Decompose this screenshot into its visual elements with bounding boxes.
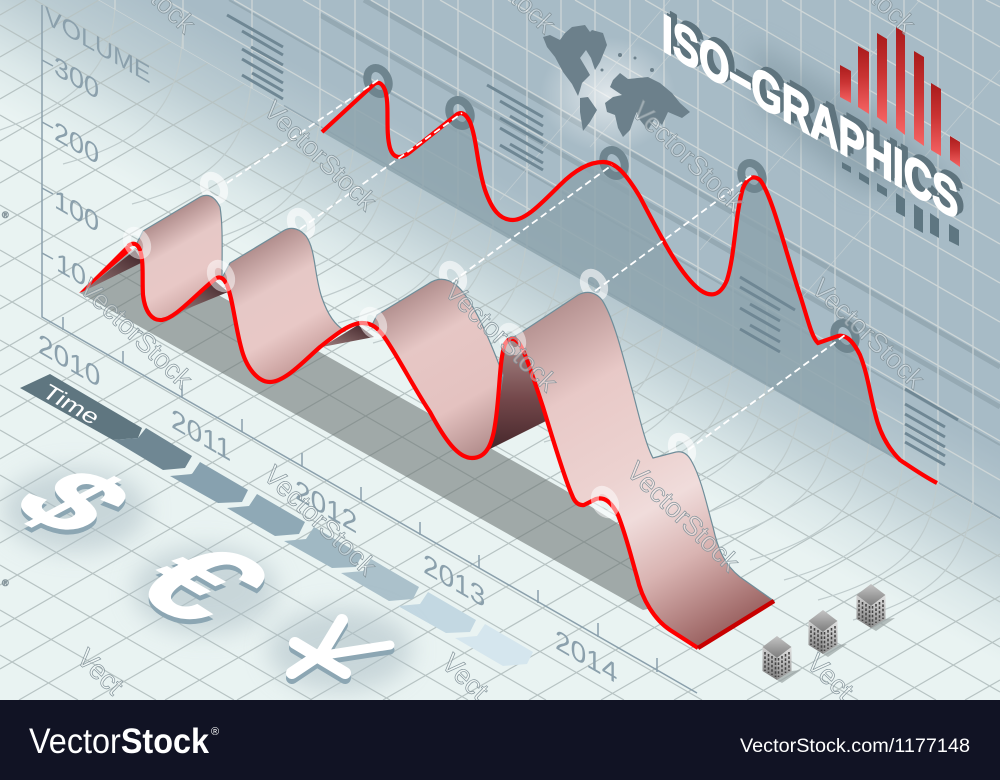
tick label 300: 300 bbox=[54, 51, 99, 106]
ribbon segment 1 bbox=[137, 195, 222, 320]
tick label 200: 200 bbox=[54, 116, 99, 171]
watermarks: Vect bbox=[71, 643, 130, 701]
text block 1 bbox=[227, 15, 283, 99]
footer image id: VectorStock.com/1177148 bbox=[740, 736, 970, 757]
ribbon segment 3 bbox=[372, 279, 503, 458]
map glow bbox=[550, 46, 663, 146]
watermarks: ® bbox=[2, 578, 9, 588]
ribbon segment 2 bbox=[222, 228, 345, 382]
ribbon start wedge bbox=[79, 245, 132, 293]
icon: yen bbox=[268, 608, 412, 692]
title: ISO–GRAPHICS bbox=[665, 2, 961, 231]
watermarks: Vect bbox=[801, 648, 860, 706]
crest rings behind ribbon bbox=[200, 172, 696, 465]
year 2013: 2013 bbox=[423, 548, 485, 614]
ribbon fold shadow 2 bbox=[322, 325, 374, 347]
footer bar bbox=[0, 700, 1000, 780]
icon: euro: € bbox=[96, 522, 308, 644]
watermarks: VectorStock bbox=[439, 276, 564, 398]
axis lines bbox=[42, 5, 697, 693]
chart: wall shadow under curve bbox=[324, 85, 898, 460]
red bar chart bbox=[840, 27, 960, 167]
axis label: volume: VOLUME bbox=[45, 1, 151, 89]
tick label 10: 10 bbox=[56, 247, 86, 294]
ribbon segment 4 bbox=[512, 292, 774, 648]
chart shadow on floor bbox=[80, 248, 690, 610]
dashed connector lines bbox=[227, 80, 845, 450]
watermarks: VectorStock bbox=[626, 96, 751, 218]
year 2010: 2010 bbox=[38, 328, 100, 394]
ribbon rings bbox=[123, 227, 619, 518]
timeline label: Time bbox=[37, 380, 105, 429]
year 2014: 2014 bbox=[555, 624, 617, 690]
watermarks: VectorStock bbox=[621, 456, 746, 578]
building 2 bbox=[808, 610, 847, 657]
ribbon fold shadow 1 bbox=[182, 282, 228, 311]
tick label 100: 100 bbox=[54, 184, 99, 239]
footer logo registered mark: ® bbox=[211, 726, 219, 738]
title shadow bbox=[750, 40, 960, 190]
ribbon front red line bbox=[128, 244, 698, 648]
year 2011: 2011 bbox=[171, 403, 231, 468]
watermarks: VectorStock bbox=[74, 273, 199, 395]
timeline arrows bbox=[20, 374, 533, 666]
ribbon chart bbox=[79, 195, 774, 648]
icon: euro: € bbox=[96, 527, 308, 649]
world map bbox=[543, 25, 690, 137]
text block 4 bbox=[905, 389, 958, 465]
icon: euro bbox=[128, 539, 282, 641]
grey bar chart bbox=[842, 162, 959, 246]
building 1 bbox=[762, 636, 801, 683]
building 3 bbox=[856, 584, 895, 631]
footer logo: VectorStock bbox=[29, 722, 209, 761]
year 2012: 2012 bbox=[295, 474, 357, 540]
watermarks: ® bbox=[2, 210, 9, 220]
text block 3 bbox=[740, 277, 795, 352]
watermarks: VectorStock bbox=[258, 460, 383, 582]
title: ISO–GRAPHICS bbox=[668, 0, 964, 229]
watermarks: VectorStock bbox=[806, 273, 931, 395]
wall rings bbox=[363, 65, 860, 352]
text block 2 bbox=[487, 85, 543, 170]
ribbon end edge bbox=[698, 601, 774, 648]
watermarks: VectorStock bbox=[258, 95, 383, 217]
floor arcs bbox=[0, 0, 973, 620]
ribbon fold: dark inner bbox=[490, 340, 546, 449]
wall grid and stripes bbox=[98, 0, 1000, 550]
ribbon start sliver bbox=[82, 250, 143, 292]
wall chart red line bbox=[322, 83, 937, 483]
watermarks: Vect bbox=[436, 648, 495, 706]
title: ISO–GRAPHICS bbox=[662, 3, 958, 232]
